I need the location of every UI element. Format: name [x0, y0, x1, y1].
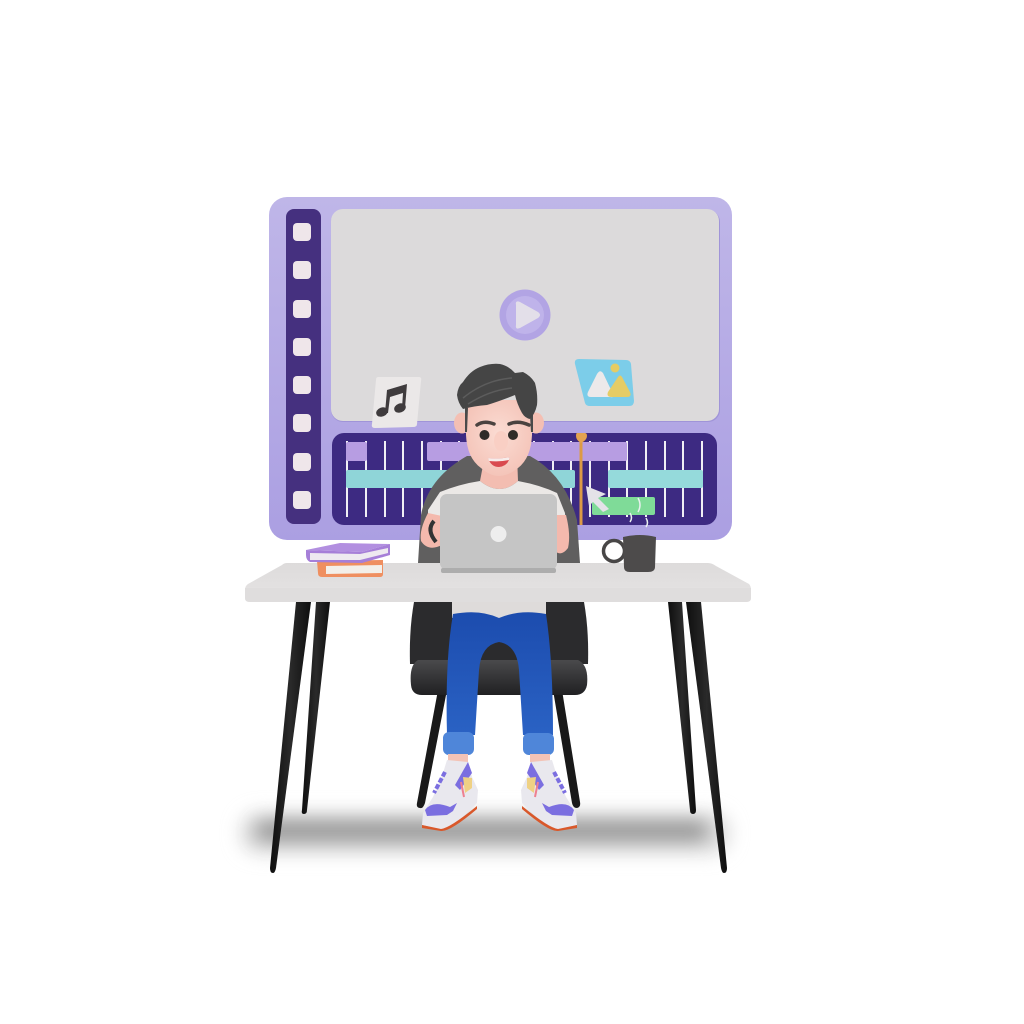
- ankles: [448, 754, 468, 762]
- icon: image card: [575, 359, 634, 406]
- hair: [457, 364, 537, 419]
- left cuff: [443, 732, 474, 755]
- chair backrest: [410, 602, 588, 664]
- nose: [494, 431, 508, 451]
- books: [306, 543, 390, 577]
- left arm and hand: [421, 513, 442, 548]
- playhead: [576, 433, 587, 525]
- right cuff: [523, 733, 554, 755]
- right arm and hand: [556, 515, 569, 553]
- person lower body: [422, 602, 577, 831]
- chair seat: [411, 660, 587, 695]
- jeans: [447, 612, 553, 735]
- icon: cursor: [586, 486, 609, 512]
- desk surface: [245, 563, 751, 602]
- film strip: [286, 209, 321, 524]
- neck: [480, 455, 518, 489]
- ears: [454, 412, 544, 434]
- chair legs: [417, 690, 447, 808]
- eyebrows and eyes: [477, 422, 529, 440]
- left shoe: [422, 760, 478, 831]
- icon: music card: [372, 377, 421, 428]
- clip squiggles: [630, 498, 648, 527]
- video screen: [331, 209, 720, 422]
- chair lower body: [410, 602, 588, 808]
- face: [466, 400, 532, 476]
- timeline clips: [346, 442, 703, 515]
- right shoe: [521, 760, 577, 831]
- orange book: [317, 560, 383, 577]
- mouth: [488, 457, 510, 467]
- shirt under desk: [452, 602, 546, 618]
- timeline ticks: [347, 441, 702, 517]
- purple book: [306, 543, 390, 563]
- coffee mug: [604, 535, 656, 572]
- laptop: [440, 494, 557, 573]
- desk: [245, 563, 751, 873]
- person upper body: [421, 364, 569, 553]
- desk back legs: [302, 602, 696, 814]
- t-shirt: [428, 481, 566, 530]
- timeline panel: [332, 433, 717, 527]
- desk front legs: [270, 602, 727, 873]
- floor shadow: [240, 812, 730, 854]
- chair back: [418, 456, 580, 563]
- side hair: [465, 408, 533, 432]
- desk front edge: [245, 588, 751, 602]
- panel: video editor board: [269, 197, 732, 540]
- icon: play button: [500, 290, 550, 340]
